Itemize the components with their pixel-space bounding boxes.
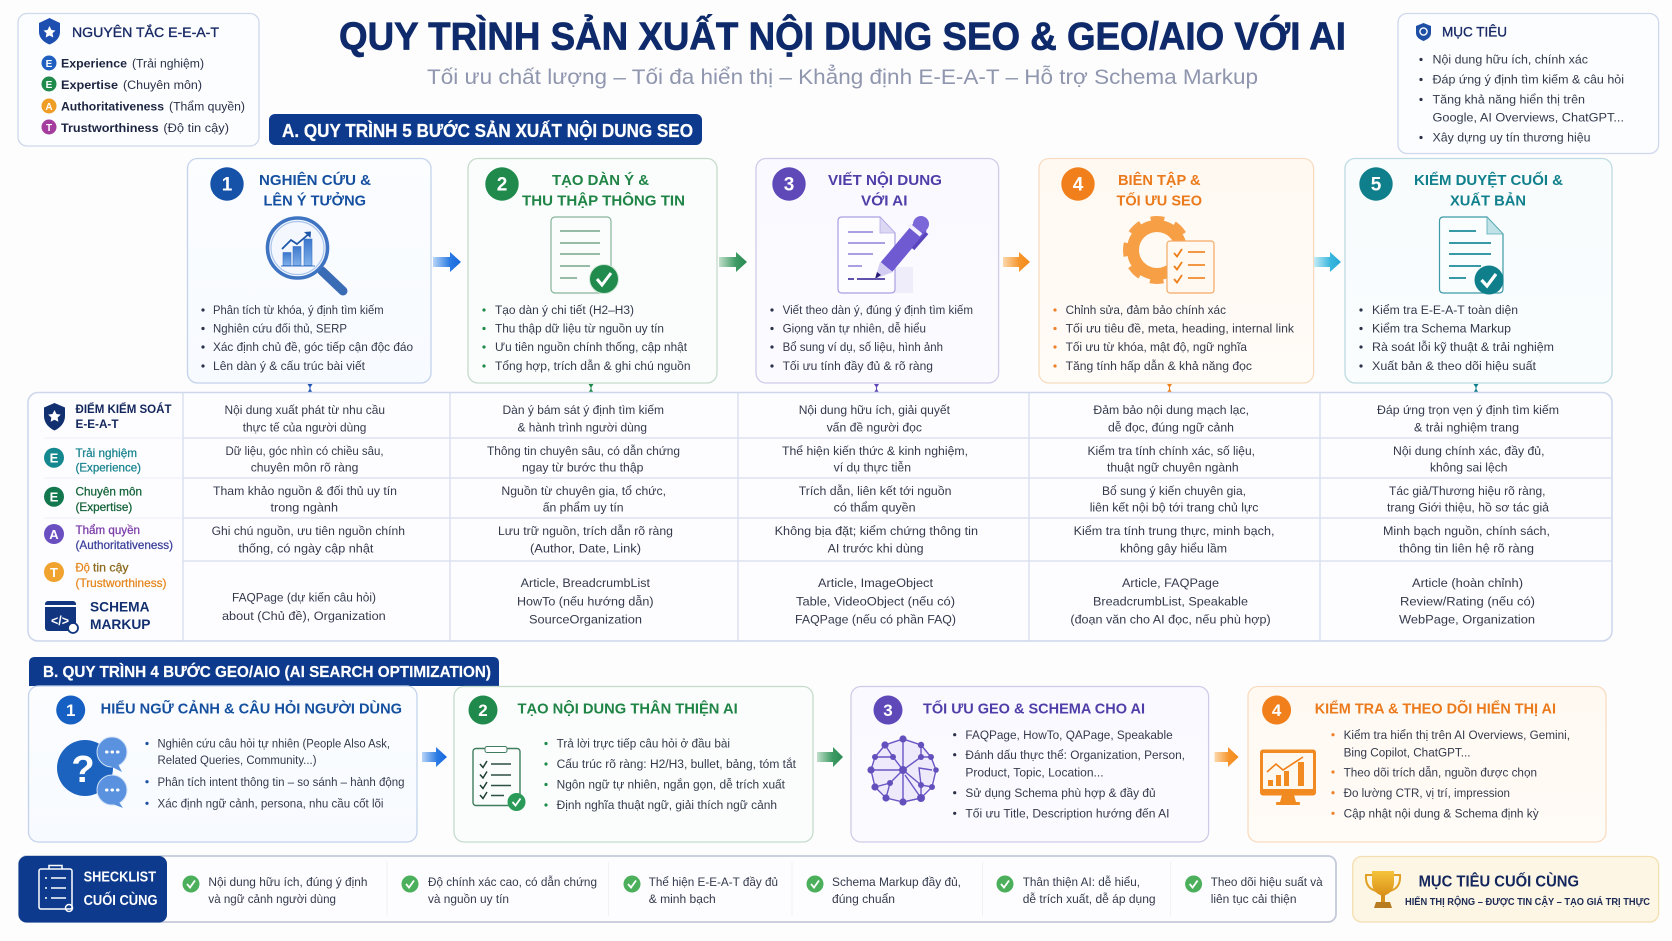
table column: step 3 checkpoints: Nội dung hữu ích, giải quyết bbox=[799, 403, 951, 417]
heading: step 4: BIÊN TẬP & bbox=[1118, 171, 1201, 189]
table column: step 1 checkpoints: chuyên môn rõ ràng bbox=[251, 460, 359, 474]
row label: expertise: (Expertise) bbox=[76, 501, 132, 514]
list: step 2: Tạo dàn ý chi tiết (H2–H3) bbox=[495, 303, 634, 317]
table column: step 2 checkpoints bbox=[487, 403, 680, 626]
table column: step 2 checkpoints: ấn phẩm uy tín bbox=[543, 500, 624, 514]
table column: step 1 checkpoints: FAQPage (dự kiến câu hỏi) bbox=[232, 590, 376, 604]
list: step 3 bbox=[770, 303, 973, 373]
list: step 5: Xuất bản & theo dõi hiệu suất bbox=[1372, 359, 1537, 373]
objectives list: Google, AI Overviews, ChatGPT... bbox=[1432, 110, 1624, 124]
connectors: steps to checkpoint table bbox=[308, 384, 1478, 392]
row label: E-E-A-T checkpoint: ĐIỂM KIỂM SOÁT bbox=[76, 403, 172, 416]
arrow: step 1 to 2 bbox=[433, 252, 461, 272]
table column: step 3 checkpoints bbox=[775, 403, 978, 626]
final goal tagline: HIỂN THỊ RỘNG – ĐƯỢC TIN CẬY – TẠO GIÁ TRỊ THỰC bbox=[1405, 895, 1650, 908]
table column: step 2 checkpoints: Article, BreadcrumbList bbox=[521, 576, 651, 590]
table column: step 2 checkpoints: & hành trình người dùng bbox=[518, 420, 647, 434]
table column: step 3 checkpoints: Thể hiện kiến thức & kinh nghiệm, bbox=[782, 444, 968, 458]
icon: question bubbles: ? bbox=[71, 749, 95, 791]
arrow: GEO 3 to 4 bbox=[1214, 747, 1239, 767]
table column: step 3 checkpoints: AI trước khi dùng bbox=[828, 542, 924, 556]
panel: final checklist bbox=[18, 856, 1336, 922]
badge: 5: 5 bbox=[1371, 174, 1382, 196]
checklist item 2: và nguồn uy tín bbox=[428, 892, 509, 906]
title: QUY TRÌNH SẢN XUẤT NỘI DUNG SEO & GEO/AIO VỚI AI bbox=[339, 14, 1346, 58]
heading: section B banner bbox=[29, 657, 499, 700]
heading: section A banner: A. QUY TRÌNH 5 BƯỚC SẢN XUẤT NỘI DUNG SEO bbox=[282, 120, 693, 141]
checklist item 5: Thân thiện AI: dễ hiểu, bbox=[1023, 874, 1140, 889]
heading: section A banner bbox=[269, 114, 702, 145]
checklist item 6: Theo dõi hiệu suất và bbox=[1211, 875, 1323, 889]
table column: step 5 checkpoints: WebPage, Organization bbox=[1399, 612, 1535, 626]
list: step 5: Kiểm tra Schema Markup bbox=[1372, 322, 1511, 336]
badge: 5 bbox=[1359, 167, 1393, 201]
panel: GEO step 2 bbox=[454, 686, 813, 842]
table column: step 3 checkpoints: Article, ImageObject bbox=[818, 576, 934, 590]
checklist item 3: & minh bạch bbox=[649, 892, 716, 906]
row label: schema markup: SCHEMA bbox=[90, 599, 150, 615]
list: GEO step 4 bbox=[1331, 728, 1570, 820]
icon: shield bbox=[39, 18, 60, 44]
arrow: GEO 2 to 3 bbox=[817, 747, 843, 767]
panel: step 3 bbox=[756, 158, 999, 383]
row: trustworthiness: T bbox=[46, 123, 52, 134]
table column: step 2 checkpoints: SourceOrganization bbox=[529, 612, 642, 626]
list: step 2 bbox=[482, 303, 691, 373]
checklist item 3 bbox=[624, 875, 778, 906]
panel: GEO step 3 bbox=[851, 686, 1209, 842]
row label: authoritativeness: (Authoritativeness) bbox=[76, 539, 173, 552]
table column: step 4 checkpoints: (đoạn văn cho AI đọc, nếu phù hợp) bbox=[1070, 612, 1271, 626]
heading: step 1 bbox=[259, 171, 371, 210]
list: GEO step 3 bbox=[953, 728, 1185, 820]
list: step 1: Lên dàn ý & cấu trúc bài viết bbox=[213, 359, 366, 373]
arrow: step 3 to 4 bbox=[1003, 252, 1030, 272]
row label: authoritativeness bbox=[44, 524, 173, 552]
table column: step 1 checkpoints: Nội dung xuất phát từ nhu cầu bbox=[224, 403, 385, 417]
row label: schema markup: </> bbox=[51, 614, 69, 628]
heading: step 5: XUẤT BẢN bbox=[1450, 192, 1526, 210]
heading: final goal: MỤC TIÊU CUỐI CÙNG bbox=[1419, 873, 1579, 891]
table column: step 5 checkpoints: thông tin liên hệ rõ ràng bbox=[1399, 542, 1534, 556]
table column: step 5 checkpoints bbox=[1377, 403, 1559, 626]
checklist item 2 bbox=[402, 874, 597, 906]
panel: step 5 bbox=[1345, 158, 1612, 383]
table column: step 1 checkpoints: thống, có ngày cập nhật bbox=[238, 542, 374, 556]
heading: step 5: KIỂM DUYỆT CUỐI & bbox=[1414, 171, 1563, 189]
list: step 4 bbox=[1053, 303, 1295, 373]
badge: 3 bbox=[772, 167, 806, 201]
table column: step 5 checkpoints: Đáp ứng trọn vẹn ý định tìm kiếm bbox=[1377, 403, 1559, 417]
checklist item 1 bbox=[182, 875, 368, 906]
icon: trophy bbox=[1366, 871, 1400, 908]
badge: 1 bbox=[210, 167, 244, 201]
row label: expertise: Chuyên môn bbox=[76, 486, 142, 499]
panel: final goal bbox=[1353, 856, 1659, 922]
list: step 5: Rà soát lỗi kỹ thuật & trải nghiệm bbox=[1372, 339, 1554, 354]
badge: 2: 2 bbox=[497, 174, 507, 196]
table column: step 4 checkpoints: thuật ngữ chuyên ngành bbox=[1107, 460, 1239, 474]
icon: question bubbles bbox=[57, 737, 127, 808]
table column: step 4 checkpoints: Article, FAQPage bbox=[1122, 576, 1219, 590]
table column: step 4 checkpoints: Kiểm tra tính trung thực, minh bạch, bbox=[1074, 524, 1274, 538]
table column: step 5 checkpoints: Minh bạch nguồn, chính sách, bbox=[1383, 524, 1550, 538]
row: authoritativeness bbox=[42, 98, 245, 114]
icon: monitor chart bbox=[1260, 750, 1316, 805]
table column: step 5 checkpoints: Nội dung chính xác, đầy đủ, bbox=[1393, 444, 1544, 458]
subtitle: Tối ưu chất lượng – Tối đa hiển thị – Khẳng định E-E-A-T – Hỗ trợ Schema Markup bbox=[427, 65, 1258, 89]
row label: experience bbox=[44, 447, 141, 475]
row: expertise: Expertise bbox=[61, 78, 118, 92]
icon: document and pen bbox=[838, 216, 929, 293]
table column: step 2 checkpoints: ngay từ bước thu thập bbox=[522, 460, 644, 474]
table column: step 1 checkpoints: Tham khảo nguồn & đối thủ uy tín bbox=[213, 484, 397, 498]
list: GEO step 1: Nghiên cứu câu hỏi tự nhiên (People Also Ask, bbox=[158, 736, 390, 750]
icon: reviewed document bbox=[1440, 217, 1504, 294]
heading: step 5 bbox=[1414, 171, 1563, 210]
heading: step 2 bbox=[522, 171, 685, 210]
objectives list: Xây dựng uy tín thương hiệu bbox=[1432, 130, 1591, 144]
arrow: GEO 1 to 2 bbox=[422, 747, 447, 767]
icon: magnifier chart bbox=[268, 218, 343, 291]
row label: trustworthiness bbox=[44, 562, 167, 590]
checklist item 4: đúng chuẩn bbox=[832, 892, 895, 906]
table column: step 3 checkpoints: Không bịa đặt; kiểm chứng thông tin bbox=[775, 524, 978, 538]
badge: GEO 3 bbox=[874, 696, 902, 724]
checklist item 5: dễ trích xuất, dễ áp dụng bbox=[1023, 891, 1156, 906]
checklist item 4: Schema Markup đầy đủ, bbox=[832, 875, 961, 889]
row: expertise: (Chuyên môn) bbox=[123, 78, 202, 92]
table column: step 1 checkpoints: about (Chủ đề), Organization bbox=[222, 609, 386, 623]
list: step 5 bbox=[1359, 303, 1554, 373]
list: step 2: Thu thập dữ liệu từ nguồn uy tín bbox=[495, 322, 664, 336]
checklist item 1: Nội dung hữu ích, đúng ý định bbox=[208, 875, 368, 889]
icon: network brain bbox=[867, 735, 939, 806]
badge: 4: 4 bbox=[1073, 174, 1084, 196]
icon: clipboard checklist bbox=[473, 746, 526, 811]
row: expertise: E bbox=[46, 80, 53, 91]
row: experience bbox=[42, 56, 204, 70]
heading: step 2: THU THẬP THÔNG TIN bbox=[522, 192, 685, 210]
list: GEO step 3: FAQPage, HowTo, QAPage, Speakable bbox=[965, 728, 1173, 742]
list: step 4: Chỉnh sửa, đảm bảo chính xác bbox=[1066, 303, 1226, 317]
heading: GEO step 2: TẠO NỘI DUNG THÂN THIỆN AI bbox=[518, 700, 738, 718]
row: experience: (Trải nghiệm) bbox=[132, 56, 204, 70]
heading: step 3: VIẾT NỘI DUNG bbox=[828, 171, 942, 189]
checklist item 6 bbox=[1185, 875, 1323, 906]
table column: step 3 checkpoints: ví dụ thực tiễn bbox=[834, 460, 911, 474]
heading: step 4 bbox=[1116, 171, 1202, 210]
badge: GEO 1: 1 bbox=[66, 701, 75, 720]
list: step 2: Tổng hợp, trích dẫn & ghi chú nguồn bbox=[495, 358, 691, 373]
list: GEO step 4: Đo lường CTR, vị trí, impression bbox=[1344, 786, 1510, 800]
row label: authoritativeness: Thẩm quyền bbox=[76, 524, 140, 537]
list: GEO step 4: Bing Copilot, ChatGPT... bbox=[1344, 745, 1470, 759]
list: GEO step 1: Xác định ngữ cảnh, persona, nhu cầu cốt lõi bbox=[158, 796, 384, 810]
list: step 4: Tối ưu từ khóa, mật độ, ngữ nghĩa bbox=[1066, 340, 1247, 354]
heading: step 1: LÊN Ý TƯỞNG bbox=[264, 192, 366, 210]
table column: step 4 checkpoints: Đảm bảo nội dung mạch lạc, bbox=[1093, 403, 1249, 417]
row label: E-E-A-T checkpoint bbox=[44, 403, 172, 431]
heading: step 3 bbox=[828, 171, 942, 210]
badge: GEO 4 bbox=[1262, 696, 1291, 724]
arrow: step 2 to 3 bbox=[719, 252, 747, 272]
heading: principles: NGUYÊN TẮC E-E-A-T bbox=[72, 23, 219, 40]
list: step 1: Xác định chủ đề, góc tiếp cận độc đáo bbox=[213, 340, 413, 354]
table column: step 2 checkpoints: Thông tin chuyên sâu, có dẫn chứng bbox=[487, 443, 680, 458]
checklist item 5 bbox=[996, 874, 1156, 906]
list: step 3: Bổ sung ví dụ, số liệu, hình ảnh bbox=[783, 340, 943, 354]
list: GEO step 2: Định nghĩa thuật ngữ, giải thích ngữ cảnh bbox=[557, 798, 777, 812]
table column: step 4 checkpoints: dễ đọc, đúng ngữ cảnh bbox=[1108, 420, 1234, 434]
checklist item 1: và ngữ cảnh người dùng bbox=[208, 892, 336, 906]
list: GEO step 3: Product, Topic, Location... bbox=[965, 765, 1104, 779]
badge: 1: 1 bbox=[222, 174, 233, 196]
heading: GEO step 1: HIỂU NGỮ CẢNH & CÂU HỎI NGƯỜI DÙNG bbox=[101, 700, 402, 718]
list: GEO step 3: Đánh dấu thực thể: Organization, Person, bbox=[965, 748, 1185, 762]
table column: step 1 checkpoints bbox=[212, 403, 405, 623]
row: authoritativeness: A bbox=[45, 102, 53, 113]
table column: step 2 checkpoints: (Author, Date, Link) bbox=[530, 542, 641, 556]
row label: expertise bbox=[44, 486, 142, 514]
table column: step 4 checkpoints: không gây hiểu lầm bbox=[1120, 542, 1227, 556]
table column: step 2 checkpoints: Lưu trữ nguồn, trích dẫn rõ ràng bbox=[498, 523, 673, 538]
panel: step 1 bbox=[188, 158, 431, 383]
table column: step 2 checkpoints: HowTo (nếu hướng dẫn) bbox=[517, 594, 654, 608]
checklist item 6: liên tục cải thiện bbox=[1211, 892, 1297, 906]
heading: step 3: VỚI AI bbox=[861, 192, 908, 210]
icon: gear and checklist bbox=[1121, 214, 1214, 293]
list: GEO step 2: Cấu trúc rõ ràng: H2/H3, bullet, bảng, tóm tắt bbox=[557, 756, 797, 771]
heading block: checklist: CUỐI CÙNG bbox=[84, 891, 158, 909]
row label: experience: (Experience) bbox=[76, 462, 141, 475]
badge: GEO 4: 4 bbox=[1272, 701, 1282, 720]
table column: step 1 checkpoints: trong ngành bbox=[270, 500, 338, 514]
objectives list: Đáp ứng ý định tìm kiếm & câu hỏi bbox=[1432, 72, 1624, 86]
table column: step 5 checkpoints: & trải nghiệm trang bbox=[1414, 420, 1519, 434]
list: step 3: Viết theo dàn ý, đúng ý định tìm kiếm bbox=[783, 303, 973, 317]
row label: expertise: E bbox=[50, 490, 59, 504]
row label: schema markup bbox=[45, 599, 150, 633]
badge: 4 bbox=[1061, 167, 1095, 201]
table column: step 1 checkpoints: Dữ liệu, góc nhìn có chiều sâu, bbox=[226, 444, 384, 458]
table column: step 4 checkpoints bbox=[1070, 403, 1274, 626]
heading block: checklist: SHECKLIST bbox=[84, 870, 156, 886]
arrow: step 4 to 5 bbox=[1314, 252, 1341, 272]
row label: E-E-A-T checkpoint: E-E-A-T bbox=[76, 418, 118, 431]
table column: step 4 checkpoints: Kiểm tra tính chính xác, số liệu, bbox=[1088, 444, 1255, 458]
list: GEO step 2 bbox=[544, 736, 797, 812]
badge: 3: 3 bbox=[784, 174, 794, 196]
heading: objectives: MỤC TIÊU bbox=[1442, 24, 1507, 40]
list: GEO step 4: Kiểm tra hiển thị trên AI Overviews, Gemini, bbox=[1344, 728, 1570, 742]
checklist item 4 bbox=[806, 875, 961, 906]
badge: GEO 3: 3 bbox=[883, 701, 893, 720]
table column: step 3 checkpoints: Table, VideoObject (nếu có) bbox=[796, 594, 955, 608]
heading: step 4: TỐI ƯU SEO bbox=[1116, 192, 1202, 210]
icon: document with check bbox=[551, 217, 618, 294]
row: experience: Experience bbox=[61, 56, 127, 70]
list: step 4: Tối ưu tiêu đề, meta, heading, internal link bbox=[1066, 322, 1295, 336]
list: step 1: Nghiên cứu đối thủ, SERP bbox=[213, 322, 347, 336]
heading: step 2: TẠO DÀN Ý & bbox=[552, 171, 649, 189]
panel: GEO step 4 bbox=[1248, 686, 1606, 842]
row label: trustworthiness: tin cậy bbox=[93, 562, 129, 575]
list: GEO step 1: Phân tích intent thông tin – so sánh – hành động bbox=[158, 775, 405, 789]
row: trustworthiness bbox=[42, 120, 229, 135]
list: step 4: Tăng tính hấp dẫn & khả năng đọc bbox=[1066, 358, 1252, 373]
list: GEO step 3: Tối ưu Title, Description hướng đến AI bbox=[965, 806, 1170, 820]
panel: step 4 bbox=[1039, 158, 1314, 383]
list: GEO step 2: Ngôn ngữ tự nhiên, ngắn gọn, dễ trích xuất bbox=[557, 776, 786, 792]
table column: step 5 checkpoints: Article (hoàn chỉnh) bbox=[1412, 576, 1523, 590]
panel: GEO step 1 bbox=[28, 686, 417, 842]
table column: step 1 checkpoints: thực tế của người dùng bbox=[243, 420, 367, 434]
objectives list: Tăng khả năng hiển thị trên bbox=[1432, 92, 1585, 106]
icon: checklist clipboard bbox=[39, 866, 72, 912]
table column: step 4 checkpoints: BreadcrumbList, Speakable bbox=[1093, 594, 1248, 608]
table column: step 2 checkpoints: Dàn ý bám sát ý định tìm kiếm bbox=[502, 403, 664, 417]
row: authoritativeness: (Thẩm quyền) bbox=[169, 100, 245, 114]
list: step 2: Ưu tiên nguồn chính thống, cập nhật bbox=[495, 340, 688, 354]
row: expertise bbox=[42, 76, 202, 92]
heading: GEO step 3: TỐI ƯU GEO & SCHEMA CHO AI bbox=[923, 700, 1145, 718]
table column: step 1 checkpoints: Ghi chú nguồn, ưu tiên nguồn chính bbox=[212, 524, 405, 538]
list: step 5: Kiểm tra E-E-A-T toàn diện bbox=[1372, 303, 1518, 317]
table column: step 3 checkpoints: Trích dẫn, liên kết tới nguồn bbox=[799, 483, 952, 498]
panel: E-E-A-T checkpoint table bbox=[28, 392, 1612, 641]
badge: GEO 2 bbox=[468, 696, 498, 724]
table column: step 3 checkpoints: FAQPage (nếu có phần FAQ) bbox=[795, 612, 956, 626]
icon: objective shield bbox=[1416, 23, 1431, 41]
row label: trustworthiness: T bbox=[50, 565, 58, 580]
heading: step 1: NGHIÊN CỨU & bbox=[259, 171, 371, 189]
row: trustworthiness: (Độ tin cậy) bbox=[163, 121, 229, 135]
row: experience: E bbox=[46, 59, 53, 70]
table column: step 5 checkpoints: trang Giới thiệu, hồ sơ tác giả bbox=[1387, 500, 1549, 514]
row label: trustworthiness: (Trustworthiness) bbox=[76, 577, 167, 590]
badge: 2 bbox=[485, 167, 519, 201]
list: step 3: Giọng văn tự nhiên, dễ hiểu bbox=[783, 320, 926, 336]
list: GEO step 4: Cập nhật nội dung & Schema định kỳ bbox=[1344, 806, 1539, 820]
row label: authoritativeness: A bbox=[49, 527, 59, 542]
list: GEO step 4: Theo dõi trích dẫn, nguồn được chọn bbox=[1344, 764, 1537, 779]
heading: GEO step 4: KIỂM TRA & THEO DÕI HIỂN THỊ AI bbox=[1315, 700, 1556, 718]
table column: step 4 checkpoints: Bổ sung ý kiến chuyên gia, bbox=[1102, 484, 1246, 498]
row label: experience: Trải nghiệm bbox=[76, 447, 137, 460]
list: step 1 bbox=[201, 303, 413, 373]
table column: step 5 checkpoints: Tác giả/Thương hiệu rõ ràng, bbox=[1389, 484, 1546, 498]
list: GEO step 3: Sử dụng Schema phù hợp & đầy đủ bbox=[965, 786, 1156, 800]
list: GEO step 1 bbox=[145, 736, 405, 810]
heading: section B banner: B. QUY TRÌNH 4 BƯỚC GEO/AIO (AI SEARCH OPTIMIZATION) bbox=[43, 662, 491, 681]
checklist item 3: Thể hiện E-E-A-T đầy đủ bbox=[649, 875, 778, 889]
heading block: checklist bbox=[18, 856, 167, 922]
table column: step 2 checkpoints: Nguồn từ chuyên gia, tổ chức, bbox=[501, 484, 666, 498]
row label: schema markup: MARKUP bbox=[90, 616, 150, 632]
panel: objectives bbox=[1398, 14, 1659, 154]
table column: step 5 checkpoints: không sai lệch bbox=[1430, 460, 1508, 474]
table column: step 4 checkpoints: liên kết nội bộ tới trang chủ lực bbox=[1090, 500, 1258, 514]
objectives list: Nội dung hữu ích, chính xác bbox=[1432, 52, 1588, 66]
badge: GEO 2: 2 bbox=[478, 701, 488, 720]
list: step 1: Phân tích từ khóa, ý định tìm kiếm bbox=[213, 303, 384, 317]
table column: step 3 checkpoints: có thẩm quyền bbox=[834, 500, 916, 514]
row label: trustworthiness: Độ bbox=[76, 562, 90, 575]
row label: experience: E bbox=[50, 450, 59, 466]
panel: step 2 bbox=[468, 158, 717, 383]
list: GEO step 1: Related Queries, Community...) bbox=[158, 753, 316, 767]
table column: step 5 checkpoints: Review/Rating (nếu có) bbox=[1400, 594, 1535, 608]
list: GEO step 2: Trả lời trực tiếp câu hỏi ở đầu bài bbox=[557, 736, 730, 750]
checklist item 2: Độ chính xác cao, có dẫn chứng bbox=[428, 874, 597, 889]
panel: E-E-A-T principles bbox=[18, 14, 259, 146]
row: authoritativeness: Authoritativeness bbox=[61, 100, 164, 114]
badge: GEO 1 bbox=[56, 696, 85, 724]
row: trustworthiness: Trustworthiness bbox=[61, 121, 159, 135]
objectives list bbox=[1419, 52, 1624, 144]
list: step 3: Tối ưu tính đầy đủ & rõ ràng bbox=[783, 359, 933, 373]
table column: step 3 checkpoints: vấn đề người đọc bbox=[827, 420, 922, 434]
